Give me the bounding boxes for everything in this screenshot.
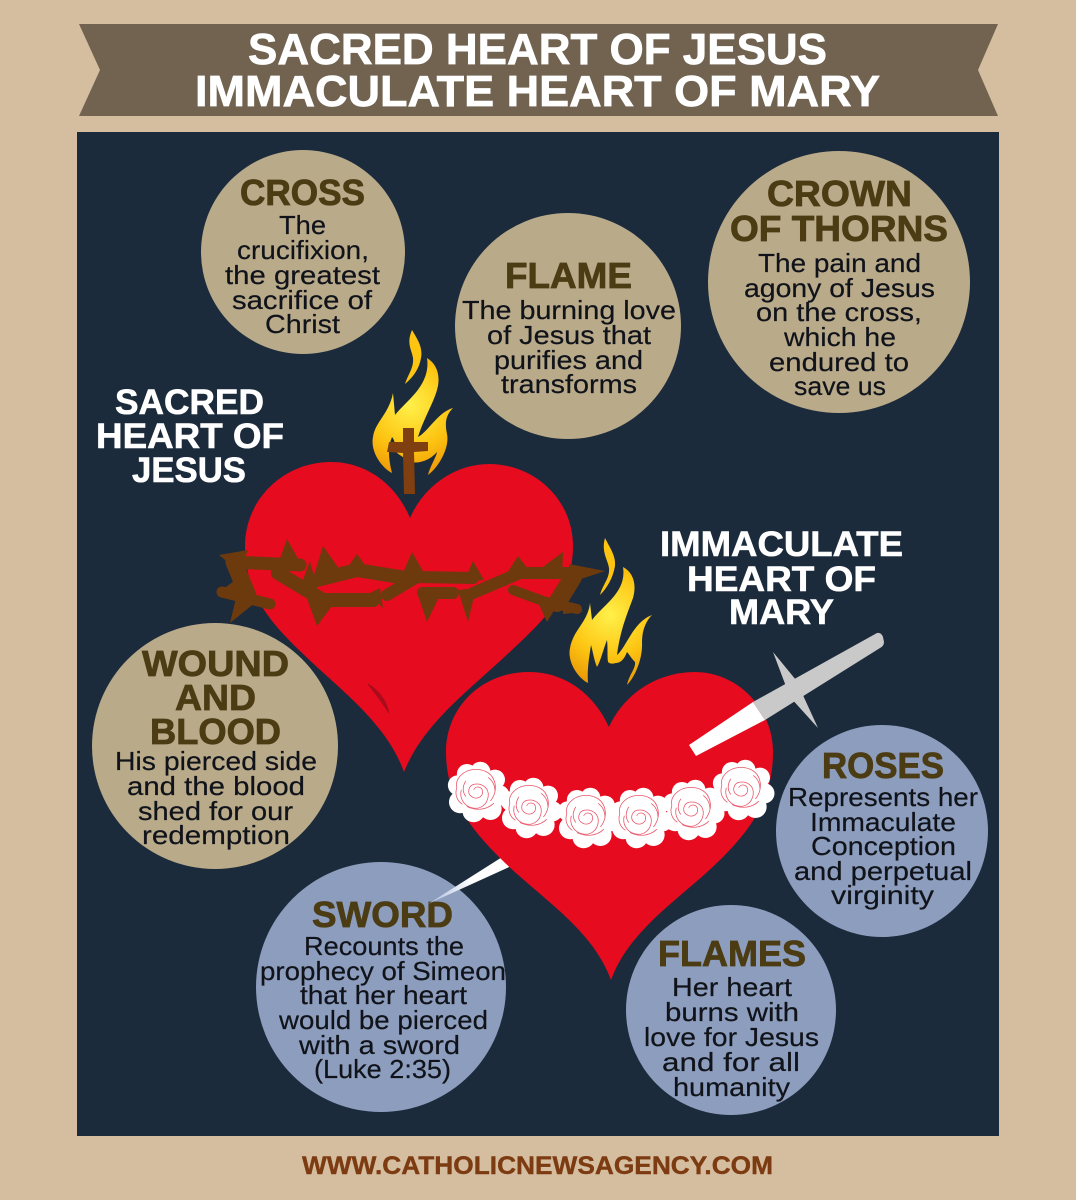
label: sacred heart of jesus: SACRED <box>115 383 264 422</box>
crown of thorns <box>218 539 605 626</box>
main dark panel <box>77 132 999 1136</box>
heading: crown of thorns: OF THORNS <box>730 208 948 249</box>
description: wound and blood: shed for our <box>138 796 293 826</box>
title line 2: IMMACULATE HEART OF MARY <box>195 67 880 116</box>
heading: crown of thorns: CROWN <box>767 173 912 214</box>
label: sacred heart of jesus: HEART OF <box>96 417 284 456</box>
heading: sword: SWORD <box>312 894 453 935</box>
title banner <box>79 24 998 116</box>
heading: wound and blood: AND <box>175 677 256 718</box>
description: wound and blood: and the blood <box>127 771 305 801</box>
description: sword: (Luke 2:35) <box>314 1054 451 1084</box>
description: flames: burns with <box>665 997 799 1027</box>
immaculate heart <box>446 538 884 980</box>
description: roses: Immaculate <box>810 807 956 837</box>
label: sacred heart of jesus: JESUS <box>132 451 246 490</box>
circle: roses <box>776 725 988 937</box>
label: sacred heart of jesus <box>96 383 284 490</box>
description: sword: would be pierced <box>278 1005 488 1035</box>
description: flame: transforms <box>501 369 637 399</box>
heading: flame: FLAME <box>505 255 632 296</box>
description: flame: of Jesus that <box>487 320 652 350</box>
description: roses: Conception <box>811 831 956 861</box>
description: roses: and perpetual <box>794 856 972 886</box>
description: flames: humanity <box>673 1072 790 1102</box>
description: flames: Her heart <box>672 972 793 1002</box>
description: crown of thorns: agony of Jesus <box>744 273 935 303</box>
description: crown of thorns: on the cross, <box>756 297 922 327</box>
description: crown of thorns <box>744 248 935 401</box>
description: roses <box>788 782 978 910</box>
cross <box>387 428 428 494</box>
rose garland <box>448 760 774 848</box>
circle: flames <box>626 905 836 1115</box>
circle: wound and blood <box>92 623 338 869</box>
description: wound and blood: His pierced side <box>115 746 317 776</box>
flame: mary <box>569 538 652 685</box>
flame: jesus <box>373 330 453 475</box>
description: flame <box>462 295 676 399</box>
description: roses: Represents her <box>788 782 978 812</box>
sword hilt and blade <box>689 633 884 756</box>
description: sword: prophecy of Simeon <box>260 956 506 986</box>
description: flames: love for Jesus <box>644 1022 819 1052</box>
heart shape: jesus <box>245 462 573 772</box>
description: cross: The <box>279 210 326 240</box>
heading: roses: ROSES <box>822 745 944 786</box>
circle: sword <box>256 862 506 1112</box>
description: sword: with a sword <box>298 1030 460 1060</box>
description: sword: that her heart <box>300 980 468 1010</box>
description: crown of thorns: The pain and <box>758 248 921 278</box>
circle: crown of thorns <box>708 151 970 413</box>
sacred heart <box>245 330 573 772</box>
title line 1: SACRED HEART OF JESUS <box>248 25 827 74</box>
description: crown of thorns: which he <box>783 322 896 352</box>
description: flame: The burning love <box>462 295 676 325</box>
description: flame: purifies and <box>494 345 643 375</box>
description: crown of thorns: save us <box>794 371 886 401</box>
label: immaculate heart of mary: HEART OF <box>687 560 876 599</box>
description: crown of thorns: endured to <box>769 347 909 377</box>
heading: wound and blood: WOUND <box>142 643 289 684</box>
description: wound and blood: redemption <box>142 820 290 850</box>
heading: flames: FLAMES <box>658 933 806 974</box>
heading: wound and blood <box>142 643 289 752</box>
heading: cross: CROSS <box>240 172 365 213</box>
label: immaculate heart of mary: IMMACULATE <box>660 525 903 564</box>
label: immaculate heart of mary: MARY <box>729 593 834 632</box>
heart shape: mary <box>446 672 773 980</box>
description: cross: sacrifice of <box>232 285 373 315</box>
heading: crown of thorns <box>730 173 948 249</box>
circle: flame <box>455 213 681 439</box>
description: roses: virginity <box>831 880 934 910</box>
footer url: WWW.CATHOLICNEWSAGENCY.COM <box>302 1152 773 1180</box>
circle: cross <box>201 150 405 354</box>
label: immaculate heart of mary <box>660 525 903 632</box>
wound <box>368 684 389 713</box>
description: cross: the greatest <box>225 260 381 290</box>
sword blade tip <box>428 854 518 904</box>
description: cross: crucifixion, <box>237 235 369 265</box>
heading: wound and blood: BLOOD <box>150 711 281 752</box>
description: sword <box>260 931 506 1084</box>
description: sword: Recounts the <box>304 931 464 961</box>
description: cross: Christ <box>265 309 341 339</box>
description: wound and blood <box>115 746 317 850</box>
description: flames <box>644 972 819 1102</box>
description: flames: and for all <box>662 1047 800 1077</box>
description: cross <box>225 210 381 339</box>
